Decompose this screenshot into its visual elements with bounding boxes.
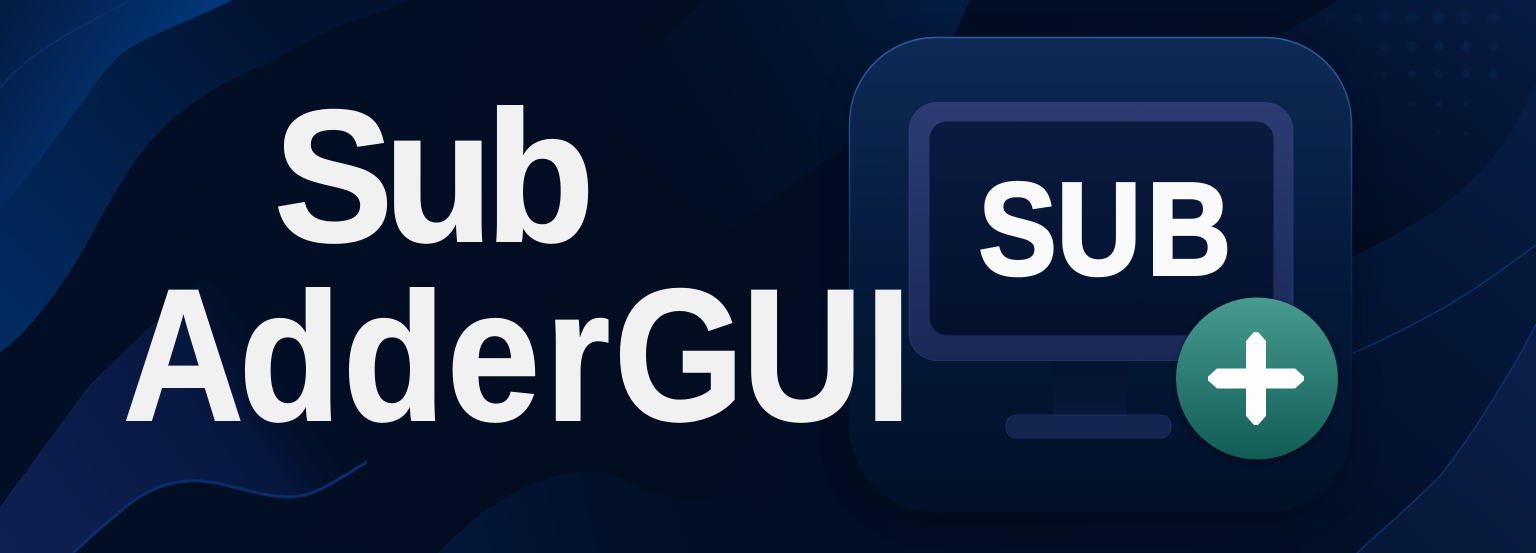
background wave: bottom left	[0, 280, 850, 553]
screen label: SUB	[978, 156, 1231, 303]
background wave: top left	[0, 0, 410, 352]
title line 1: Sub	[274, 71, 595, 281]
icon: green plus badge	[1176, 298, 1338, 460]
plus sign	[1208, 332, 1304, 425]
monitor screen	[930, 122, 1273, 335]
background wave: right side	[1277, 0, 1536, 553]
panel: rounded square	[850, 38, 1352, 512]
icon: monitor	[909, 102, 1293, 438]
halftone dots	[1325, 12, 1499, 135]
badge circle	[1176, 298, 1338, 460]
monitor base	[1006, 415, 1171, 438]
monitor bezel	[909, 102, 1293, 360]
monitor stand	[1053, 358, 1127, 418]
background wave: top centre	[560, 0, 970, 230]
title line 2: AdderGUI	[123, 250, 911, 460]
title	[126, 105, 902, 423]
app icon panel	[850, 38, 1352, 512]
